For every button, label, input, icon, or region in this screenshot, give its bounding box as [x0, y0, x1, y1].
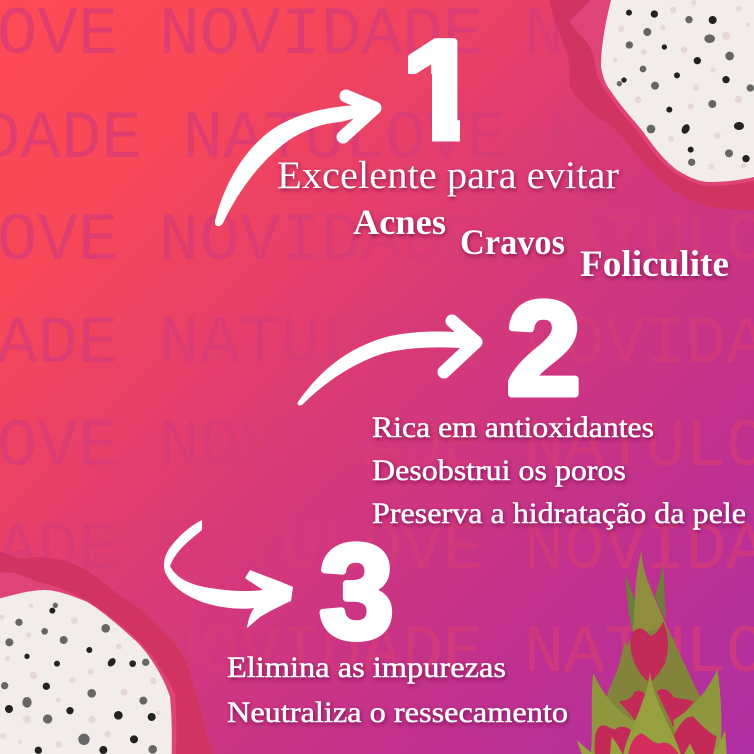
- arrow 3: [164, 520, 293, 628]
- tag: foliculite: Foliculite: [580, 244, 729, 285]
- tag: cravos: Cravos: [460, 222, 565, 262]
- text: benefits of step 2: Desobstrui os poros: [372, 454, 626, 487]
- text: benefits of step 2: Preserva a hidratação da pele: [372, 497, 746, 530]
- text: benefits of step 2: [372, 411, 746, 530]
- arrow 1: [215, 96, 378, 226]
- text: benefits of step 3: Elimina as impurezas: [227, 651, 506, 684]
- tag: acnes: Acnes: [353, 202, 446, 242]
- watermark text pattern: OVE NOVIDADE NATULO: [0, 410, 754, 486]
- arrow 2: [297, 321, 476, 405]
- step number 2: 2: [507, 275, 580, 422]
- icon: dragon fruit plant: [577, 552, 727, 754]
- text: benefits of step 2: Rica em antioxidantes: [372, 411, 654, 444]
- icon: dragon fruit slice bottom left: [0, 552, 213, 754]
- text: benefits of step 3: [227, 651, 568, 729]
- watermark text pattern: ADE NATULOVE NOVIDA: [0, 513, 754, 589]
- watermark text pattern: OVE NOVIDADE NATULO: [0, 616, 754, 692]
- text: benefits of step 3: Neutraliza o ressecamento: [227, 696, 568, 729]
- watermark text pattern: ADE NATULOVE NOVIDA: [0, 307, 754, 383]
- icon: dragon fruit slice top right: [550, 0, 754, 210]
- step number 3: 3: [320, 518, 393, 665]
- step number 1: 1: [402, 11, 480, 168]
- heading: excelente para evitar: Excelente para evitar: [277, 154, 619, 197]
